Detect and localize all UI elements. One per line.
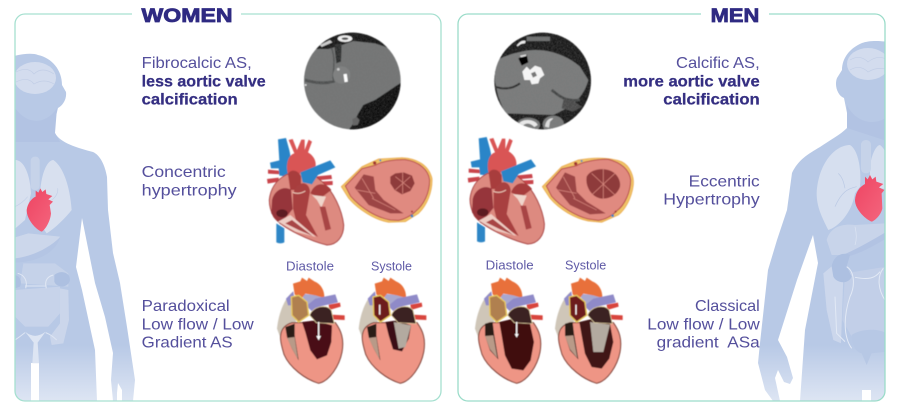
illustration: diastole heart, men <box>475 278 543 383</box>
text block: fibrocalcic <box>142 55 266 108</box>
text block: eccentric hypertrophy <box>663 173 760 209</box>
text block: fibrocalcic: less aortic valve <box>142 74 266 90</box>
text block: calcific <box>623 55 760 108</box>
text block: classical: Classical <box>695 298 760 315</box>
label: diastole, men: Diastole <box>486 259 534 273</box>
heading: WOMEN: WOMEN <box>142 5 232 27</box>
CT scan: men <box>492 30 595 133</box>
title gap: women <box>132 8 241 20</box>
illustration: systole heart, women <box>359 278 426 383</box>
label: systole, women: Systole <box>371 260 412 274</box>
illustration: heart section, women <box>267 138 344 245</box>
text block: calcific: more aortic valve <box>623 74 760 90</box>
illustration: systole heart, men <box>555 278 623 383</box>
text block: eccentric hypertrophy: Eccentric <box>689 173 760 190</box>
icon: heart in female body <box>27 188 53 232</box>
panel: men <box>458 5 900 401</box>
text block: concentric hypertrophy: hypertrophy <box>142 182 237 199</box>
text block: calcific: calcification <box>663 92 760 108</box>
text block: classical <box>647 298 760 352</box>
label: systole, men: Systole <box>565 259 606 273</box>
text block: paradoxical: Low flow / Low <box>142 316 254 333</box>
illustration: heart cross-section, men <box>542 158 633 222</box>
illustration: heart section, men <box>468 137 544 244</box>
panel: women <box>0 5 441 401</box>
text block: concentric hypertrophy: Concentric <box>142 164 226 181</box>
title gap: men <box>701 8 769 20</box>
female body illustration <box>16 54 135 400</box>
label: diastole, women: Diastole <box>286 260 334 274</box>
text block: calcific: Calcific AS, <box>676 55 760 72</box>
panel border: men <box>458 14 885 401</box>
text block: fibrocalcic: calcification <box>142 92 238 108</box>
text block: paradoxical: Gradient AS <box>142 335 233 352</box>
illustration: heart cross-section, women <box>341 158 432 222</box>
text block: concentric hypertrophy <box>142 164 237 199</box>
text block: paradoxical: Paradoxical <box>142 298 230 315</box>
text block: classical: Low flow / Low <box>647 316 760 333</box>
icon: heart in male body <box>855 175 884 222</box>
illustration: diastole heart, women <box>277 278 345 383</box>
text block: classical: gradient ASa <box>657 335 760 352</box>
panel border: women <box>15 14 441 401</box>
male body illustration <box>758 41 884 400</box>
text block: fibrocalcic: Fibrocalcic AS, <box>142 55 252 72</box>
CT scan: women <box>303 32 402 130</box>
text block: eccentric hypertrophy: Hypertrophy <box>663 192 760 209</box>
heading: MEN: MEN <box>711 5 759 27</box>
text block: paradoxical <box>142 298 254 352</box>
